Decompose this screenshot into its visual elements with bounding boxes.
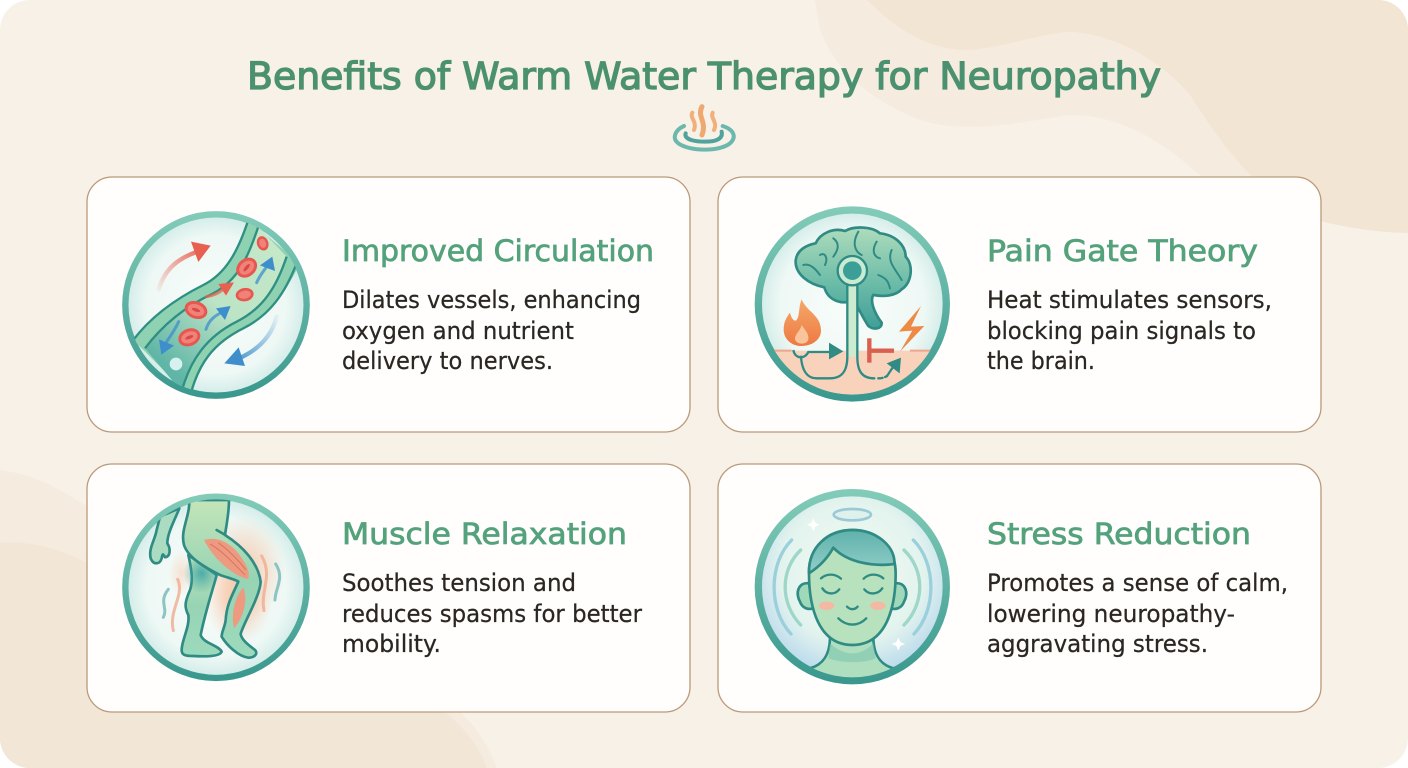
panel: improved circulation xyxy=(87,177,690,432)
arrows: blood flow xyxy=(159,242,277,366)
panel: muscle relaxation xyxy=(87,464,690,712)
body text: Dilates vessels, enhancing xyxy=(342,286,641,314)
hair xyxy=(809,530,894,573)
panel: pain gate theory xyxy=(718,177,1321,432)
head xyxy=(809,530,896,645)
heading: Pain Gate Theory xyxy=(987,234,1258,268)
front leg xyxy=(183,500,261,658)
body text xyxy=(987,286,1272,375)
heading: Improved Circulation xyxy=(342,234,654,268)
body text: mobility. xyxy=(342,630,441,658)
dashed arrow head xyxy=(887,358,901,373)
title: Benefits of Warm Water Therapy for Neuropathy xyxy=(247,55,1161,98)
icon: flame xyxy=(784,299,843,359)
body text: Heat stimulates sensors, xyxy=(987,286,1272,314)
panel: stress reduction xyxy=(718,464,1321,712)
gate symbol xyxy=(869,338,894,363)
ears xyxy=(798,583,906,609)
body text: oxygen and nutrient xyxy=(342,317,574,345)
icon: calm face xyxy=(758,493,946,682)
body text: blocking pain signals to xyxy=(987,317,1256,345)
sparkles xyxy=(807,518,905,651)
icon: legs xyxy=(125,497,307,678)
icon: blood vessel xyxy=(125,214,307,397)
nerve pathway xyxy=(801,256,893,378)
calm waves xyxy=(774,540,931,634)
body text: lowering neuropathy- xyxy=(987,600,1235,628)
body text: reduces spasms for better xyxy=(342,600,642,628)
icon: steaming water xyxy=(675,107,734,150)
facial features xyxy=(819,575,886,625)
back leg xyxy=(182,555,222,656)
heading: Muscle Relaxation xyxy=(342,517,627,551)
body text: delivery to nerves. xyxy=(342,347,553,375)
body text xyxy=(342,286,641,375)
brain xyxy=(796,227,911,328)
body text: Soothes tension and xyxy=(342,569,576,597)
blood cells xyxy=(170,235,270,370)
body text xyxy=(342,569,642,658)
body text: aggravating stress. xyxy=(987,630,1208,658)
body text: the brain. xyxy=(987,347,1095,375)
body text xyxy=(987,569,1288,658)
muscles xyxy=(204,539,249,579)
body text: Promotes a sense of calm, xyxy=(987,569,1288,597)
heading: Stress Reduction xyxy=(987,517,1251,551)
halo xyxy=(834,509,871,520)
arm xyxy=(150,508,179,563)
icon: brain and pain gate xyxy=(758,210,948,407)
icon: lightning bolt xyxy=(899,306,924,352)
motion lines xyxy=(163,556,280,631)
